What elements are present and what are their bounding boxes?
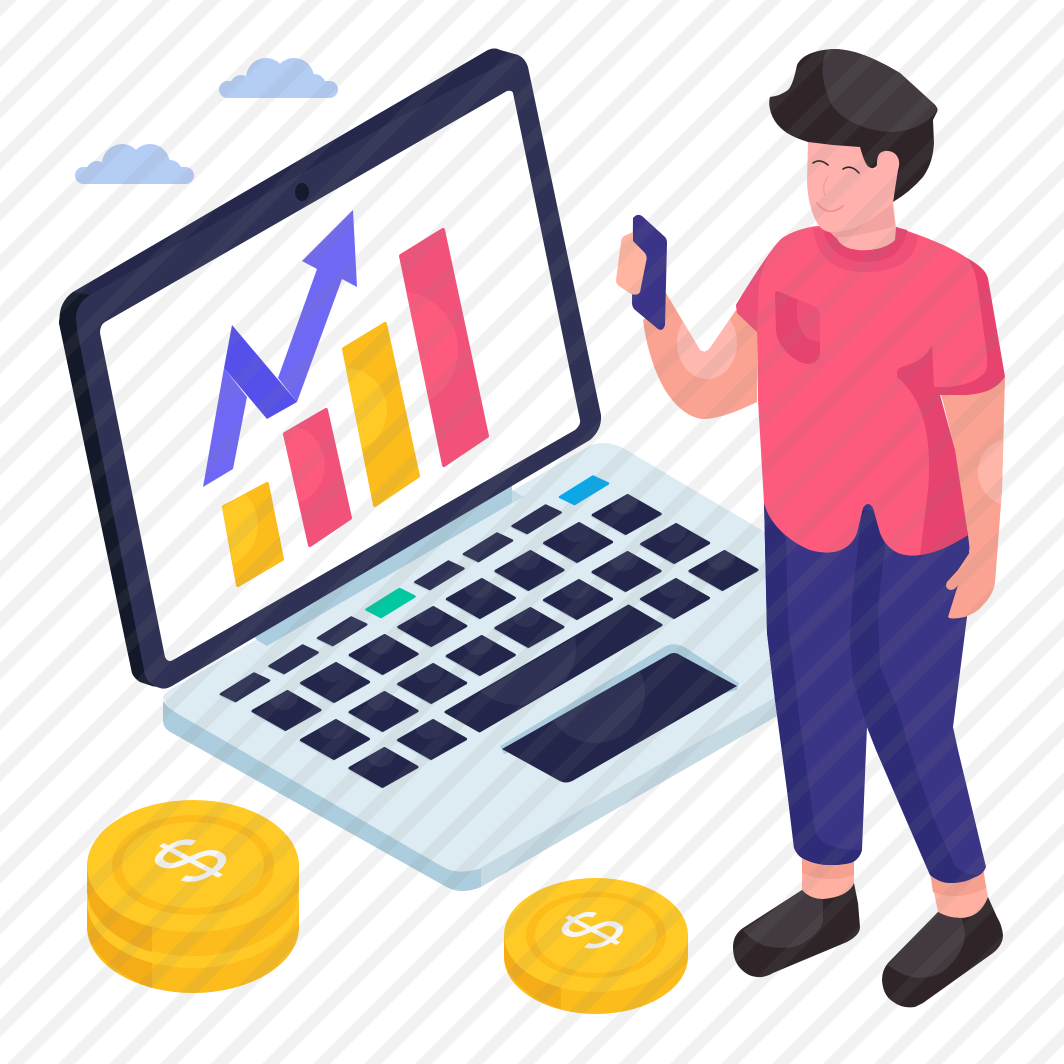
mouth: [817, 203, 843, 211]
right ankle: [930, 868, 988, 918]
left shoe: [733, 883, 860, 977]
laptop screen display: [100, 91, 580, 661]
laptop keyboard base: [163, 443, 902, 891]
coin stack large: [87, 800, 299, 993]
dollar sign large coin: $: [127, 824, 252, 896]
hand holding phone: [616, 232, 647, 295]
arrow: rising trend: [203, 210, 357, 487]
bar 2 pink: [283, 408, 352, 548]
keyboard: space bar: [446, 589, 661, 731]
bar 3 yellow: [342, 322, 420, 508]
underarm shade: [897, 345, 968, 555]
nose: [824, 177, 828, 195]
icon: cloud lower: [75, 144, 194, 184]
laptop touchpad: [500, 643, 739, 782]
hanging arm and hand: [941, 378, 1005, 618]
coin small: [504, 878, 688, 1014]
right shoe: [882, 897, 1003, 1007]
hair: [769, 49, 938, 202]
dollar sign small coin: $: [539, 899, 646, 961]
left ankle: [802, 855, 854, 899]
chart: growth bars: [222, 228, 489, 588]
keyboard: function keys row: [220, 476, 608, 702]
right sleeve band: [934, 258, 1005, 395]
left sleeve shade: [736, 240, 780, 332]
phone: [632, 215, 667, 330]
keyboard: main keys: [252, 484, 757, 788]
bar 1 yellow: [222, 482, 284, 588]
collar shade: [813, 227, 918, 272]
pants: [764, 480, 986, 883]
collar: [823, 227, 907, 262]
man figure: [616, 49, 1046, 1007]
raised arm: [643, 293, 757, 419]
bar 4 pink: [399, 228, 489, 468]
face and neck: [807, 138, 900, 250]
icon: webcam: [295, 183, 309, 201]
t-shirt: [736, 226, 1005, 556]
icon: cloud upper: [219, 58, 338, 98]
pocket: [775, 291, 820, 364]
laptop screen bezel: [59, 48, 601, 689]
eyes: [813, 161, 859, 173]
